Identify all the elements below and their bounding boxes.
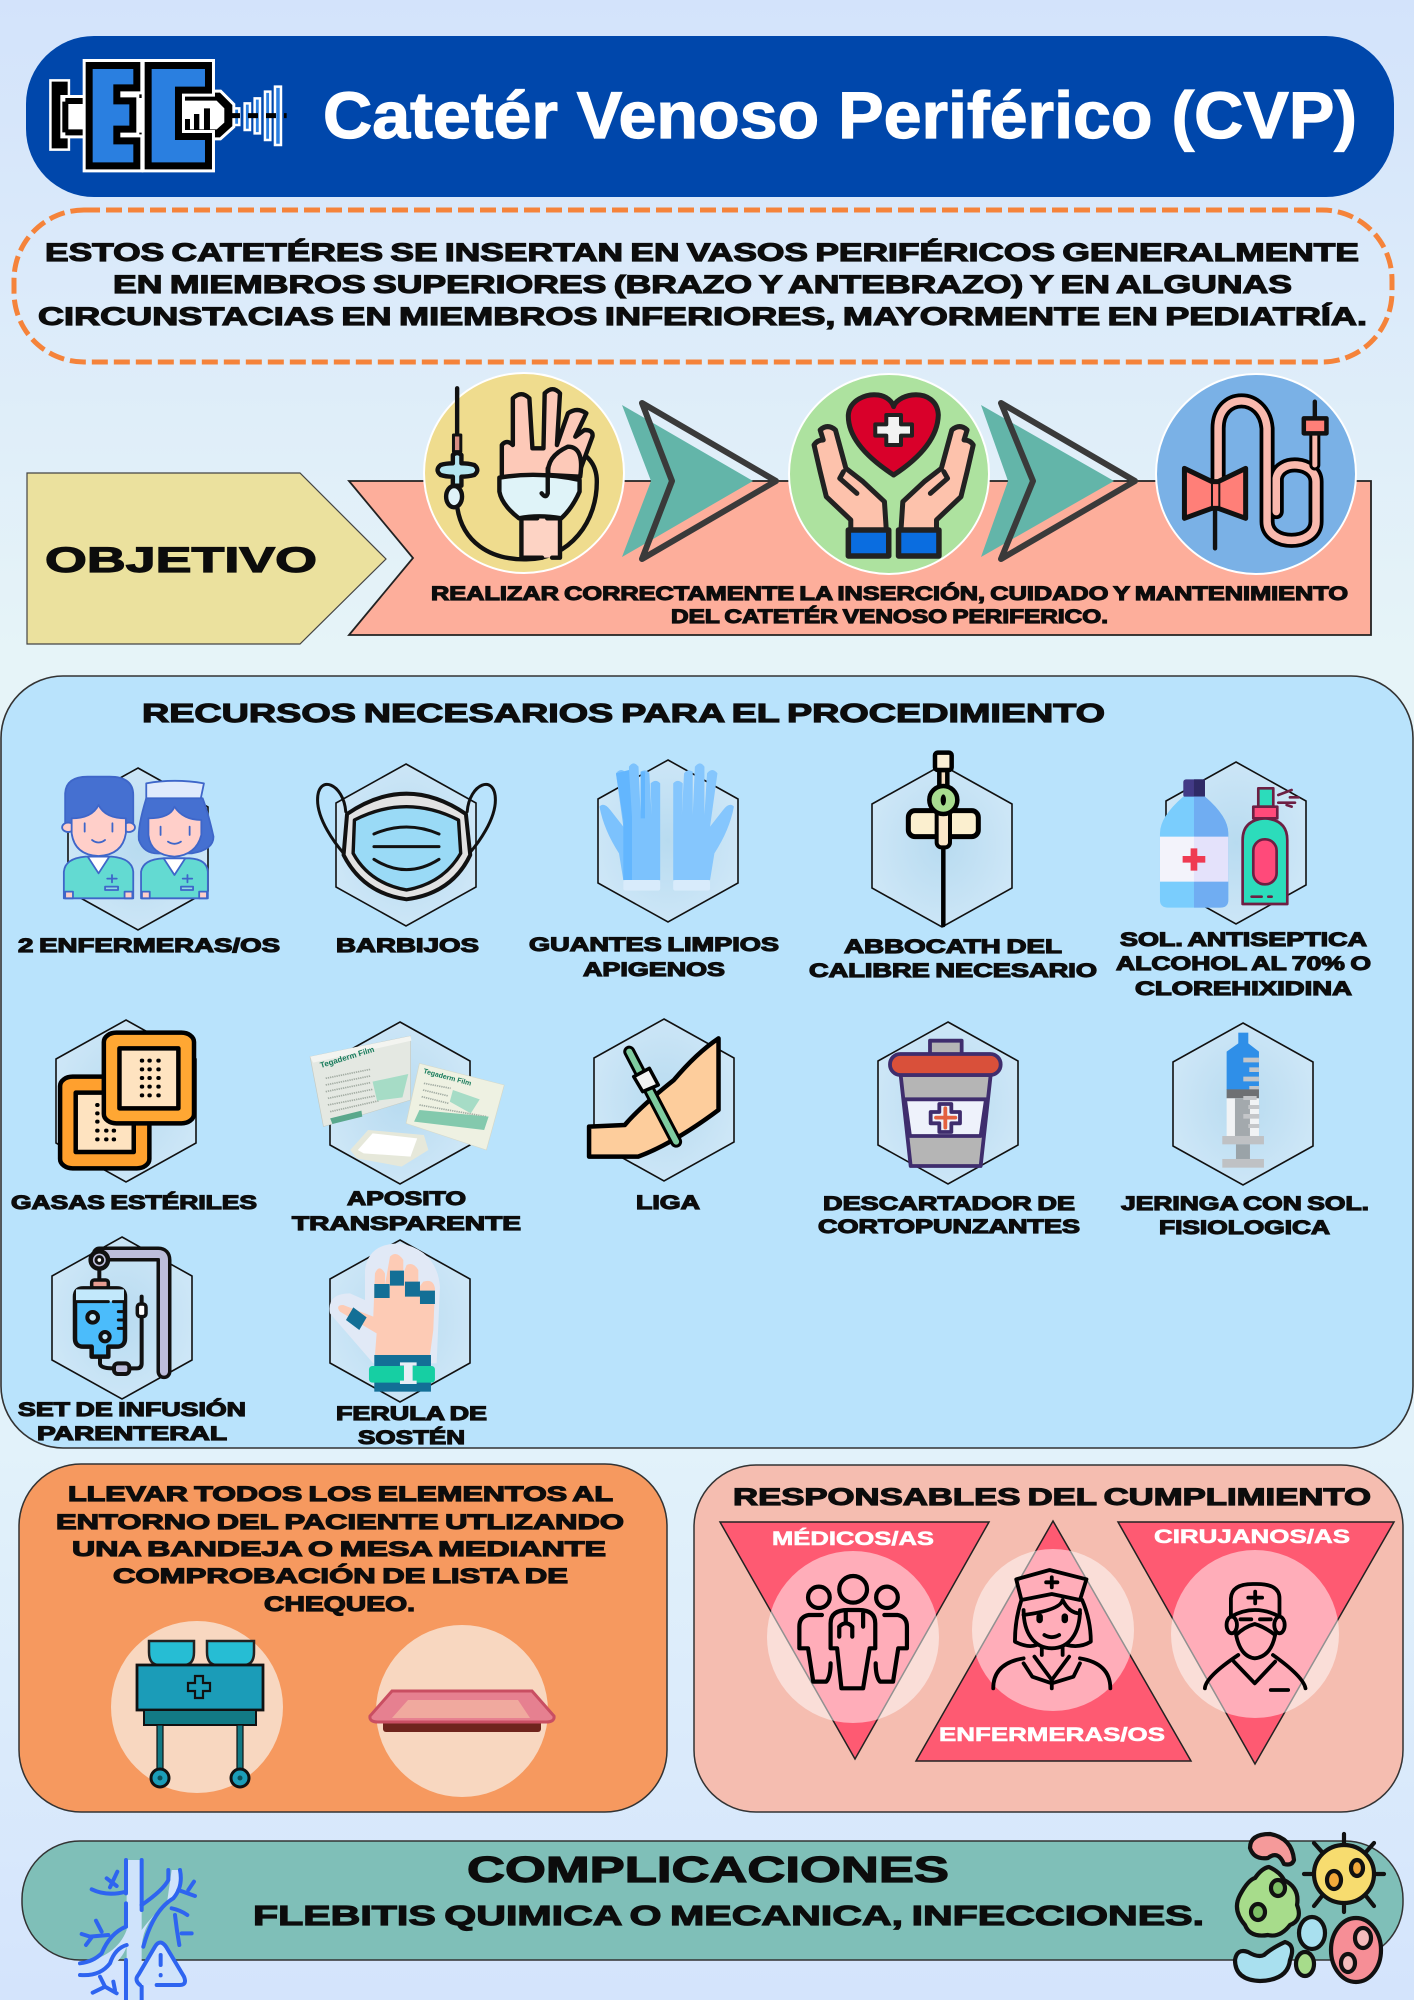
label bbox=[809, 937, 1097, 982]
label: ABBOCATH DEL bbox=[844, 937, 1063, 958]
panel: llevar elementos bbox=[19, 1464, 667, 1812]
label bbox=[292, 1189, 521, 1235]
responsables heading: RESPONSABLES DEL CUMPLIMIENTO bbox=[733, 1484, 1371, 1511]
label: PARENTERAL bbox=[37, 1424, 228, 1445]
item: barbijos bbox=[318, 764, 495, 926]
icon: microbes bbox=[1235, 1834, 1384, 1982]
icon: nurse bbox=[993, 1570, 1110, 1688]
label: CORTOPUNZANTES bbox=[818, 1217, 1080, 1238]
item: set de infusion bbox=[52, 1237, 192, 1399]
printed brand on dressing box 2: Tegaderm Film bbox=[422, 1068, 472, 1088]
item: liga bbox=[589, 1019, 734, 1181]
title: Catetér Venoso Periférico (CVP) bbox=[323, 78, 1357, 152]
label bbox=[818, 1194, 1080, 1238]
objetivo banner bbox=[349, 481, 1371, 635]
panel: responsables bbox=[694, 1465, 1403, 1812]
label: GUANTES LIMPIOS bbox=[529, 935, 779, 956]
triangle: enfermeras: ENFERMERAS/OS bbox=[939, 1725, 1165, 1746]
panel: recursos bbox=[1, 676, 1413, 1449]
item: ferula bbox=[330, 1240, 470, 1402]
complicaciones heading: COMPLICACIONES bbox=[467, 1849, 949, 1890]
item: gasas bbox=[56, 1020, 196, 1182]
icon: hands holding heart bbox=[789, 374, 989, 574]
item: abbocath bbox=[872, 753, 1012, 927]
objetivo banner: REALIZAR CORRECTAMENTE LA INSERCIÓN, CUIDADO Y MANTENIMIENTO bbox=[431, 583, 1348, 605]
item: solucion antiseptica bbox=[1160, 762, 1306, 924]
triangle: enfermeras bbox=[916, 1521, 1191, 1761]
label: CALIBRE NECESARIO bbox=[809, 961, 1097, 982]
intro dashed box: ESTOS CATETÉRES SE INSERTAN EN VASOS PERIFÉRICOS GENERALMENTE bbox=[45, 238, 1359, 267]
label: 2 ENFERMERAS/OS bbox=[18, 936, 280, 957]
icon: medical cart bbox=[111, 1621, 283, 1793]
icon: surgeon bbox=[1205, 1584, 1305, 1690]
objetivo pentagon bbox=[27, 473, 386, 644]
arrow 1 bbox=[622, 403, 776, 559]
icon: team bbox=[799, 1576, 907, 1688]
label: TRANSPARENTE bbox=[292, 1214, 521, 1235]
label bbox=[336, 1404, 487, 1449]
label: FISIOLOGICA bbox=[1159, 1218, 1330, 1239]
text block bbox=[56, 1483, 624, 1616]
label: CLOREHIXIDINA bbox=[1135, 979, 1352, 1000]
text block: COMPROBACIÓN DE LISTA DE bbox=[113, 1564, 568, 1588]
icon: tray bbox=[370, 1625, 554, 1797]
label: SOL. ANTISEPTICA bbox=[1120, 930, 1367, 951]
label bbox=[1116, 930, 1371, 1000]
intro dashed box: CIRCUNSTACIAS EN MIEMBROS INFERIORES, MAYORMENTE EN PEDIATRÍA. bbox=[38, 302, 1367, 331]
label: GASAS ESTÉRILES bbox=[11, 1192, 257, 1214]
header banner bbox=[26, 36, 1394, 197]
label: SOSTÉN bbox=[358, 1427, 465, 1449]
intro dashed box: EN MIEMBROS SUPERIORES (BRAZO Y ANTEBRAZO) Y EN ALGUNAS bbox=[113, 271, 1292, 299]
label: APIGENOS bbox=[583, 960, 725, 981]
label bbox=[18, 1399, 246, 1445]
label: SET DE INFUSIÓN bbox=[18, 1399, 246, 1421]
item: enfermeras bbox=[62, 768, 213, 930]
label: FERULA DE bbox=[336, 1404, 487, 1425]
text block: LLEVAR TODOS LOS ELEMENTOS AL bbox=[68, 1483, 613, 1506]
icon: vein alert bbox=[80, 1860, 195, 2000]
label bbox=[529, 935, 779, 981]
panel: complicaciones bbox=[22, 1834, 1403, 2000]
recursos heading: RECURSOS NECESARIOS PARA EL PROCEDIMIENTO bbox=[142, 698, 1105, 728]
triangle: cirujanos: CIRUJANOS/AS bbox=[1154, 1527, 1350, 1548]
logo: syringe HEC bbox=[57, 69, 287, 162]
item: jeringa bbox=[1173, 1023, 1313, 1185]
label bbox=[1121, 1194, 1369, 1239]
intro dashed box bbox=[14, 210, 1392, 362]
objetivo banner: DEL CATETÉR VENOSO PERIFERICO. bbox=[671, 606, 1108, 628]
label: LIGA bbox=[636, 1193, 700, 1214]
printed brand on dressing box 1: Tegaderm Film bbox=[319, 1045, 375, 1070]
label: BARBIJOS bbox=[336, 936, 479, 957]
complicaciones text: FLEBITIS QUIMICA O MECANICA, INFECCIONES. bbox=[253, 1900, 1204, 1931]
arrow 2 bbox=[981, 403, 1135, 559]
text block: CHEQUEO. bbox=[264, 1593, 415, 1616]
text block: UNA BANDEJA O MESA MEDIANTE bbox=[72, 1538, 606, 1561]
label: APOSITO bbox=[347, 1189, 466, 1210]
triangle: cirujanos bbox=[1118, 1522, 1394, 1764]
item: descartador bbox=[878, 1022, 1018, 1184]
icon: hand with catheter bbox=[424, 373, 624, 573]
label: DESCARTADOR DE bbox=[823, 1194, 1075, 1215]
icon: catheter butterfly bbox=[1156, 374, 1356, 574]
item: guantes bbox=[598, 760, 738, 922]
triangle: medicos bbox=[720, 1522, 989, 1759]
label: ALCOHOL AL 70% O bbox=[1116, 954, 1371, 975]
label: JERINGA CON SOL. bbox=[1121, 1194, 1369, 1215]
item: aposito bbox=[310, 1022, 504, 1184]
triangle: medicos: MÉDICOS/AS bbox=[772, 1528, 934, 1550]
text block: ENTORNO DEL PACIENTE UTLIZANDO bbox=[56, 1511, 624, 1534]
objetivo pentagon: OBJETIVO bbox=[45, 541, 317, 580]
